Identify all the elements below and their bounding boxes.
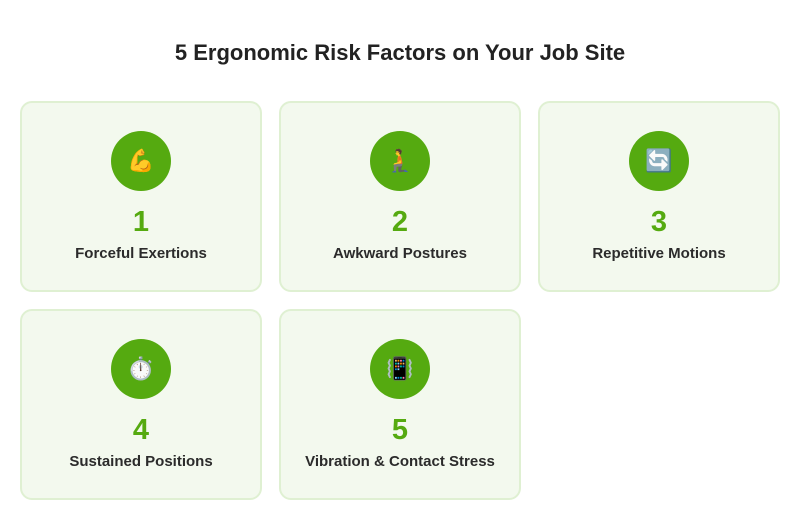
panel: awkward postures xyxy=(279,101,521,292)
panel: forceful exertions xyxy=(20,101,262,292)
icon: flexed arm: 💪 xyxy=(127,148,155,173)
icon: vibration xyxy=(370,339,430,399)
icon: kneeling person xyxy=(370,131,430,191)
number 4: 4 xyxy=(133,414,149,446)
icon: stopwatch xyxy=(111,339,171,399)
number 5: 5 xyxy=(392,414,408,446)
icon: repeat arrows xyxy=(629,131,689,191)
panel: vibration xyxy=(279,309,521,500)
number 3: 3 xyxy=(651,206,667,238)
title: 5 Ergonomic Risk Factors on Your Job Site xyxy=(175,40,625,65)
icon: flexed arm xyxy=(111,131,171,191)
icon: repeat arrows: 🔄 xyxy=(645,148,673,173)
number 2: 2 xyxy=(392,206,408,238)
label: Repetitive Motions xyxy=(592,245,726,262)
label: Vibration & Contact Stress xyxy=(305,453,495,470)
number 1: 1 xyxy=(133,206,149,238)
icon: kneeling person: 🧎 xyxy=(386,148,414,173)
icon: stopwatch: ⏱️ xyxy=(127,356,155,381)
label: Awkward Postures xyxy=(333,245,467,262)
panel: repetitive motions xyxy=(538,101,780,292)
label: Sustained Positions xyxy=(69,453,213,470)
panel: sustained positions xyxy=(20,309,262,500)
icon: vibration: 📳 xyxy=(386,356,414,381)
label: Forceful Exertions xyxy=(75,245,207,262)
